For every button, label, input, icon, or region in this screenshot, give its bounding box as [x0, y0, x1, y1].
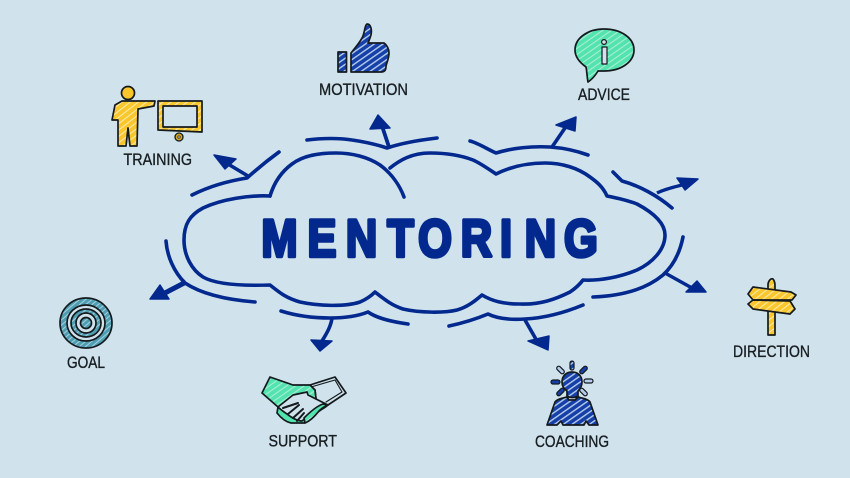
burst line: top left — [192, 152, 279, 195]
arrow: advice — [552, 117, 576, 147]
arrow: training — [214, 155, 248, 176]
burst line: right upper — [613, 172, 672, 208]
icon: info speech bubble — [575, 29, 634, 82]
cloud outline — [184, 153, 665, 312]
icon: signpost — [748, 279, 796, 335]
label: motivation: MOTIVATION — [319, 80, 408, 99]
arrow: support — [311, 318, 332, 351]
icon: coaching person with bulb — [547, 361, 598, 425]
icon: presenter at screen — [112, 86, 202, 146]
arrow: coaching — [525, 320, 549, 350]
title: MENTORING — [261, 209, 598, 269]
label: training: TRAINING — [124, 150, 192, 169]
burst line: left — [166, 241, 255, 302]
burst line: top middle — [307, 138, 437, 148]
label: support: SUPPORT — [268, 432, 337, 450]
burst line: right lower — [593, 237, 683, 297]
label: advice: ADVICE — [578, 85, 630, 104]
burst line: top right — [470, 141, 588, 155]
label: direction: DIRECTION — [733, 342, 810, 361]
arrow: motivation — [370, 115, 390, 147]
arrow: direction — [665, 273, 706, 292]
burst line: bottom right — [449, 305, 583, 326]
label: coaching: COACHING — [535, 432, 609, 451]
burst line: bottom left — [281, 311, 408, 324]
icon: handshake — [262, 377, 346, 423]
arrow: right upper — [657, 178, 698, 193]
arrow: goal — [150, 282, 186, 299]
icon: thumbs up — [338, 24, 389, 72]
label: goal: GOAL — [67, 353, 105, 372]
icon: target — [60, 298, 112, 348]
